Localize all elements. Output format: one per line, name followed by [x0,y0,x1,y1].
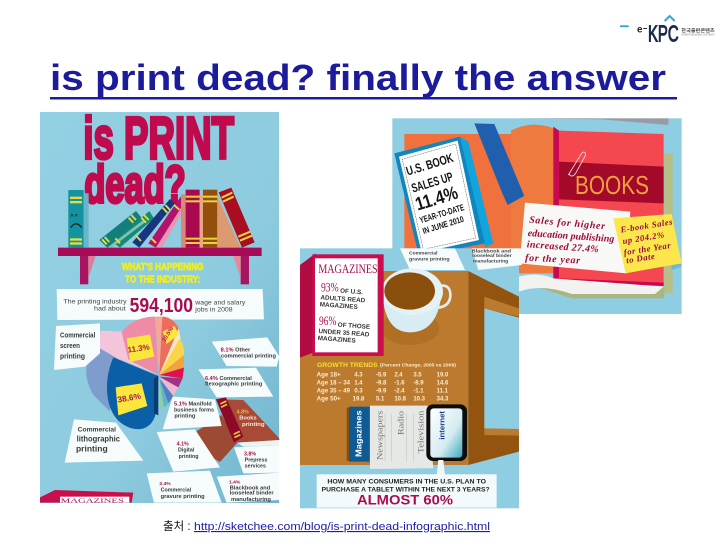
callout: 38.6%: 38.6% [117,391,142,405]
growth trends table: 19.0 [437,373,449,379]
label: 8.1% other commercial printing: 8.1% Other [221,348,251,354]
bookmark ribbon [474,123,524,205]
book: teal dead book: x x [71,212,78,218]
label: 6.4% commercial flexographic printing [198,368,273,397]
growth trends table [317,362,457,403]
callout: U.S. book sales up 11.4%: 11.4% [413,182,461,214]
cropped labels at top: manufacturing [473,258,508,264]
growth trends table: 1.4 [354,381,363,387]
callout: 11.3%: 11.3% [127,343,150,355]
label: 5.1% manifold business forms: printing [174,413,196,419]
stat box: 594,100 jobs [57,289,264,320]
shelf [58,248,262,256]
growth trends table: (Percent Change, 2005 vs 2009) [380,363,457,368]
label: 5.1% manifold business forms [163,397,222,429]
label: 6.4% commercial flexographic printing: flexographic printing [205,382,263,388]
label: commercial lithographic printing: lithographic [77,434,120,444]
logo: e-KPC: 한국출판콘텐츠 [681,27,715,34]
magazine card: OF THOSE [338,322,370,331]
logo: e-KPC [620,16,715,46]
label: 1.4% blackbook and looseleaf binder: Blackbook and [230,485,270,491]
label: 3.8% prepress services: Prepress [245,458,267,464]
cropped magazines banner [40,490,133,505]
growth trends table: 2.4 [394,373,403,379]
stat box: 594,100 jobs: had about [94,306,126,313]
label: commercial screen printing: Commercial [60,331,95,340]
pie chart: printing sectors [86,317,184,429]
callout: tablet plans: ALMOST 60% [357,491,454,507]
newspaper radio television sheet: Radio [396,411,406,435]
label: 5.1% manifold business forms: 5.1% Manifold [174,401,212,407]
note: higher education publishing: Sales for higher [529,215,606,232]
label: commercial screen printing: printing [60,352,85,361]
panel: is print dead, left infographic [40,104,279,505]
note: e-book sales: E-book Sales [619,216,674,235]
growth trends table: 10.3 [413,397,426,403]
growth trends table: Age 50+ [317,397,341,403]
magazine card: 93% [321,281,339,295]
stat box: 594,100 jobs: wage and salary [194,299,246,306]
growth trends table: 4.3 [354,373,363,379]
growth trends table: -1.1 [413,389,424,395]
paperclip [568,152,586,176]
label: 1.4% blackbook and looseleaf binder: manufacturing [231,497,271,503]
label: 4.1% digital printing [157,429,220,472]
newspaper radio television sheet: Newspapers [375,410,385,460]
desk [300,271,519,465]
open book: BOOKS [575,170,649,200]
growth trends table: -9.8 [376,381,387,387]
label: 3.8% prepress services: 3.8% [244,451,256,457]
growth trends table: Age 18+ [317,373,341,379]
growth trends table: 3.5 [413,373,422,379]
magazine card: ADULTS READ [320,294,366,304]
label: 4.1% digital printing: Digital [178,448,195,454]
growth trends table: -2.4 [394,389,405,395]
cropped labels at top: Commercial [409,250,438,256]
growth trends table: 11.1 [437,389,449,395]
growth trends table: 5.1 [376,397,385,403]
cropped labels at top: Blackbook and [472,248,511,254]
note: e-book sales [613,214,682,273]
label: 3.8% prepress services: services [245,464,266,470]
label: 1.4% blackbook and looseleaf binder [217,473,279,503]
label: commercial screen printing: screen [60,341,80,350]
magazine card: OF U.S. [340,288,363,296]
growth trends table: -5.9 [376,373,387,379]
newspaper radio television sheet: Television [415,410,425,453]
label: commercial lithographic printing: printing [76,444,108,454]
growth trends table: -8.9 [413,381,424,387]
growth trends table: 10.8 [394,397,407,403]
label: 3.8% prepress services [234,445,279,473]
note: e-book sales: to Date [625,251,656,265]
cropped labels at top: looseleaf binder [472,253,512,259]
panel: magazines, center infographic [300,248,522,508]
callout: tablet plans: HOW MANY CONSUMERS IN THE U.S. PLAN TO [327,480,486,486]
labels around pie [40,323,279,505]
label: commercial lithographic printing: Commercial [78,427,116,434]
magazine card [300,253,384,358]
label: 4.1% digital printing: 4.1% [177,441,189,447]
note: higher education publishing [520,203,630,273]
growth trends table: 0.3 [354,389,363,395]
callout: U.S. book sales up 11.4%: YEAR-TO-DATE [418,202,465,225]
subheading: what's happening: TO THE INDUSTRY: [125,274,200,285]
growth trends table: -9.9 [376,389,387,395]
magazine card: UNDER 35 READ [318,328,370,339]
source citation: 출처 : [163,520,191,533]
logo: e-KPC: KOREA PUBLISHING CONTENTS [681,34,715,37]
note: higher education publishing: increased 27.4% [526,239,600,255]
cropped magazines banner: MAGAZINES [61,498,124,505]
note: e-book sales: for the Year [623,240,672,257]
note: e-book sales: up 204.2% [622,229,665,246]
label: 2.4% commercial gravure printing: gravure printing [161,494,205,500]
title: is print dead? finally the answer [50,57,666,98]
magazine card: 96% [319,314,337,328]
growth trends table: 14.6 [437,381,449,387]
label: 5.1% manifold business forms: business forms [174,407,214,413]
stat box: 594,100 jobs: The printing industry [63,298,127,305]
tablet: internet: internet [437,410,446,440]
label: 2.4% commercial gravure printing: 2.4% [159,481,171,487]
stat box: 594,100 jobs: 594,100 [130,294,193,317]
coffee cup [381,268,450,345]
source citation: http://sketchee.com/blog/is-print-dead-infographic.html [194,521,490,533]
magazine card: MAGAZINES [318,262,378,276]
callout: U.S. book sales up 11.4% [394,137,493,257]
panel: books, right infographic [392,118,682,314]
label: 2.4% commercial gravure printing [147,471,222,503]
media devices [347,404,467,469]
logo: e-KPC: e [637,24,643,35]
book: 4.8% books printing: Books [239,416,257,422]
bookshelf with books [58,188,262,284]
book: teal dead book [68,190,89,248]
book: 4.8% books printing [196,397,279,462]
label: 8.1% other commercial printing [212,337,279,367]
logo: e-KPC: KPC [648,20,679,46]
growth trends table: GROWTH TRENDS [317,362,378,369]
label: 2.4% commercial gravure printing: Commercial [161,487,192,493]
book: 4.8% books printing: 4.8% [237,409,249,415]
note: higher education publishing: education publishing [527,228,615,245]
magazine card: MAGAZINES [320,301,358,311]
cropped labels at top: gravure printing [409,256,450,262]
magazine card: MAGAZINES [318,335,356,345]
newspaper radio television sheet [370,406,433,469]
subheading: what's happening: WHAT'S HAPPENING [122,262,204,273]
callout: tablet plans [317,460,497,508]
heading: is PRINT dead? [83,104,234,214]
label: 1.4% blackbook and looseleaf binder: 1.4% [229,479,241,485]
growth trends table: -1.6 [394,381,405,387]
label: 1.4% blackbook and looseleaf binder: looseleaf binder [230,491,274,497]
label: commercial lithographic printing [65,419,143,463]
callout: 10.5%: 10.5% [162,326,175,343]
book: 4.8% books printing: printing [242,422,265,428]
growth trends table: 34.3 [437,397,449,403]
note: higher education publishing: for the year [525,253,581,267]
subheading: what's happening [122,262,204,285]
label: 4.1% digital printing: printing [179,454,198,460]
stat box: 594,100 jobs: jobs in 2008 [194,307,233,314]
heading: is PRINT dead?: is PRINT [83,104,234,171]
growth trends table: Age 18 – 34 [317,381,351,387]
heading: is PRINT dead?: dead? [84,155,186,214]
callout: U.S. book sales up 11.4%: U.S. BOOK [404,151,456,179]
cropped labels at top [400,248,522,270]
open book [404,125,673,298]
label: 8.1% other commercial printing: commercial printing [221,353,277,359]
growth trends table: 19.8 [353,397,365,403]
label: 6.4% commercial flexographic printing: 6.4% Commercial [205,376,252,382]
callout: U.S. book sales up 11.4%: SALES UP [410,170,455,196]
callout: tablet plans: PURCHASE A TABLET WITHIN THE NEXT 3 YEARS? [322,487,490,493]
magazine cover: Magazines [355,410,364,457]
callout: U.S. book sales up 11.4%: IN JUNE 2010 [421,214,465,236]
label: commercial screen printing [54,323,100,370]
growth trends table: Age 35 – 49 [317,389,351,395]
